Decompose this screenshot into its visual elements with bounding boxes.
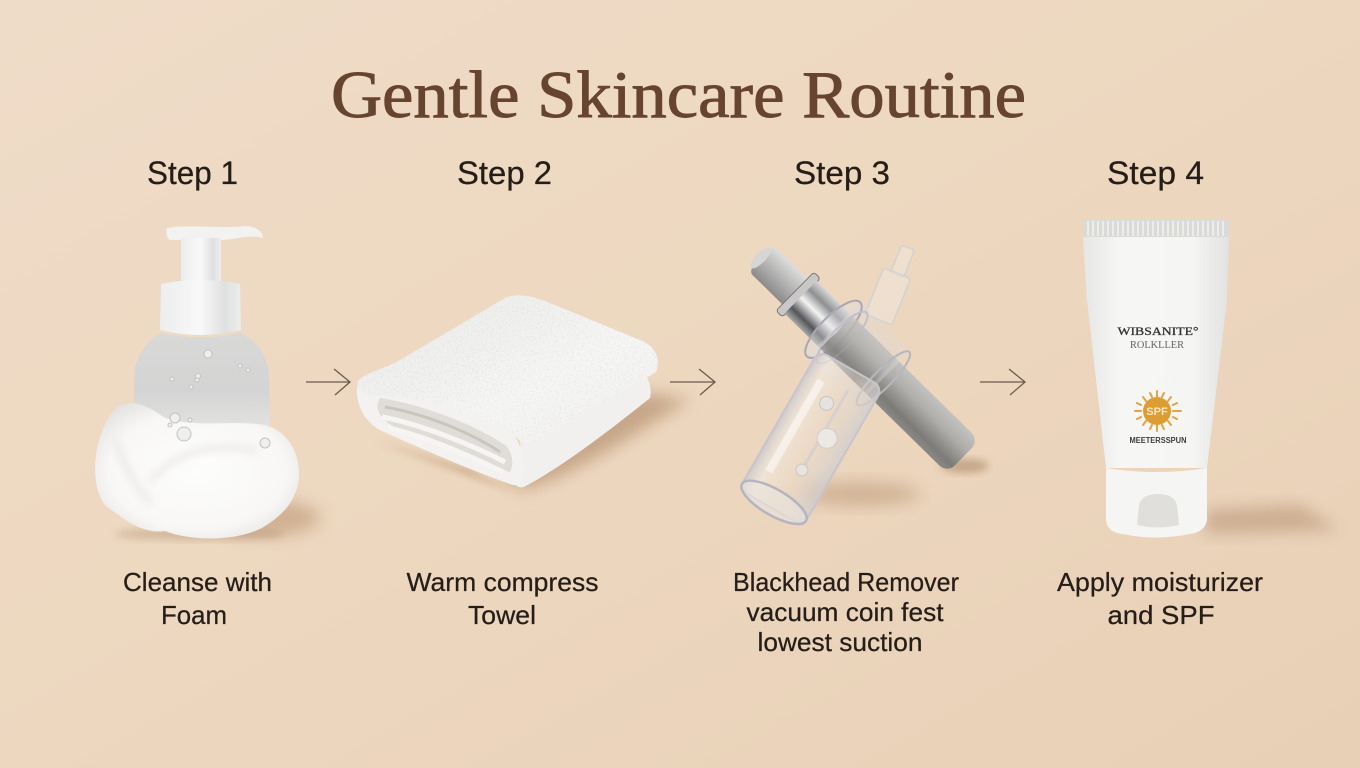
caption: step 4 xyxy=(1057,567,1263,630)
arrow: step 3 to 4 xyxy=(980,369,1025,395)
step 2 heading: Step 2 xyxy=(457,155,552,191)
icon: SPF tube: ROLKLLER xyxy=(1130,340,1184,351)
SPF sun: SPF xyxy=(1146,406,1168,418)
title: Gentle Skincare Routine xyxy=(331,58,1026,132)
caption: step 3: lowest suction xyxy=(758,627,922,657)
caption: step 3 xyxy=(733,567,959,657)
caption: step 3: vacuum coin fest xyxy=(746,597,944,627)
clear reservoir xyxy=(735,350,883,532)
icon: SPF tube: MEETERSSPUN xyxy=(1130,436,1187,445)
icon: foam pump bottle xyxy=(95,226,320,540)
caption: step 1: Foam xyxy=(161,600,227,630)
silver body xyxy=(731,227,990,484)
caption: step 1 xyxy=(123,567,272,630)
clear upper tube xyxy=(865,242,921,325)
icon: SPF tube xyxy=(1083,220,1340,538)
caption: step 2: Warm compress xyxy=(406,567,598,597)
caption: step 2 xyxy=(406,567,598,630)
step 4 heading: Step 4 xyxy=(1107,155,1204,191)
icon: blackhead remover device xyxy=(731,227,990,532)
arrow: step 2 to 3 xyxy=(670,369,715,395)
cap xyxy=(1106,468,1207,538)
icon: folded towel xyxy=(357,295,690,492)
arrow: step 1 to 2 xyxy=(306,369,350,395)
caption: step 3: Blackhead Remover xyxy=(733,567,959,597)
step 1 heading: Step 1 xyxy=(147,155,238,191)
caption: step 4: and SPF xyxy=(1108,600,1214,630)
bubbles xyxy=(168,350,270,448)
SPF sun xyxy=(1135,391,1181,431)
step 3 heading: Step 3 xyxy=(794,155,890,191)
caption: step 4: Apply moisturizer xyxy=(1057,567,1263,597)
product label text: WIBSANITE° xyxy=(1118,324,1199,338)
tube crimp xyxy=(1083,220,1229,237)
caption: step 2: Towel xyxy=(468,600,536,630)
caption: step 1: Cleanse with xyxy=(123,567,272,597)
towel front fold xyxy=(357,382,524,485)
